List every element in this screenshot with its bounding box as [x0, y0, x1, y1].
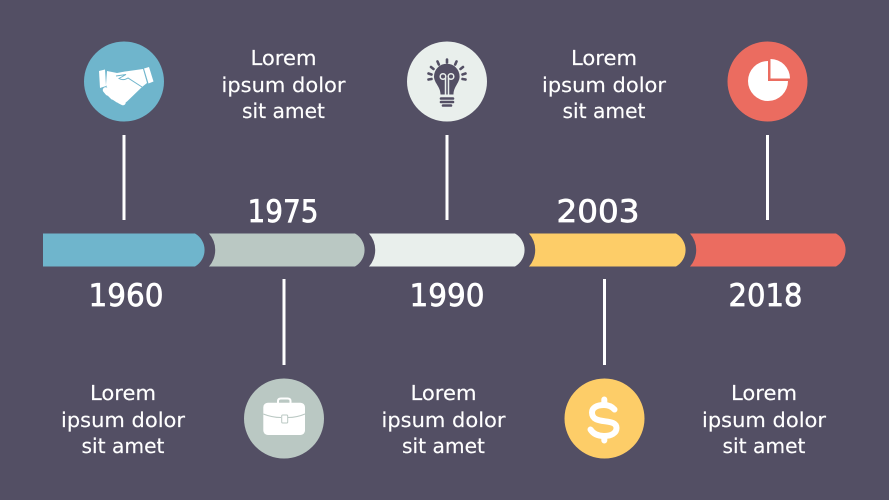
text block: bottom 1960 [61, 381, 186, 458]
text block: top 1975: Lorem [250, 46, 316, 70]
text block: bottom 1960: Lorem [90, 381, 156, 405]
connector 1990 [446, 135, 448, 220]
year 1975: 1975 [248, 194, 318, 230]
segment: 2018 red [690, 234, 846, 266]
connector 2003 [603, 279, 606, 365]
text block: top 1975: ipsum dolor [222, 73, 346, 97]
text block: bottom 1990 [382, 381, 506, 458]
text block: bottom 1960: ipsum dolor [61, 408, 186, 432]
text block: bottom 2018: sit amet [722, 434, 806, 458]
text block: top 2003: Lorem [571, 46, 637, 70]
segment: 1960 blue [43, 234, 205, 266]
year 2003: 2003 [556, 194, 640, 230]
year 1990: 1990 [410, 278, 484, 314]
text block: bottom 1960: sit amet [82, 434, 164, 458]
text block: bottom 1990: sit amet [402, 434, 485, 458]
connector 1975 [282, 279, 286, 365]
connector 2018 [766, 135, 769, 220]
text block: bottom 2018 [702, 381, 827, 458]
segment: 2003 yellow [529, 234, 686, 266]
icon: dollar coin [564, 378, 644, 458]
text block: top 2003: ipsum dolor [542, 73, 667, 97]
text block: bottom 1990: ipsum dolor [382, 408, 506, 432]
connector 1960 [122, 135, 126, 220]
text block: top 2003 [542, 46, 667, 123]
text block: bottom 2018: Lorem [731, 381, 797, 405]
text block: top 2003: sit amet [562, 99, 646, 123]
icon: briefcase [244, 378, 324, 458]
year 1960: 1960 [88, 278, 164, 314]
icon: pie chart [728, 42, 808, 122]
icon: handshake [84, 42, 164, 122]
connector lines [124, 135, 768, 365]
text block: top 1975 [222, 46, 346, 123]
year labels [88, 194, 802, 314]
segment: 1975 grey [209, 234, 365, 266]
timeline bar [43, 234, 846, 266]
segment: 1990 off-white [369, 234, 525, 266]
text block: bottom 2018: ipsum dolor [702, 408, 827, 432]
text block: bottom 1990: Lorem [410, 381, 476, 405]
icon: light bulb [407, 42, 487, 122]
year 2018: 2018 [728, 278, 802, 314]
text block: top 1975: sit amet [242, 99, 325, 123]
